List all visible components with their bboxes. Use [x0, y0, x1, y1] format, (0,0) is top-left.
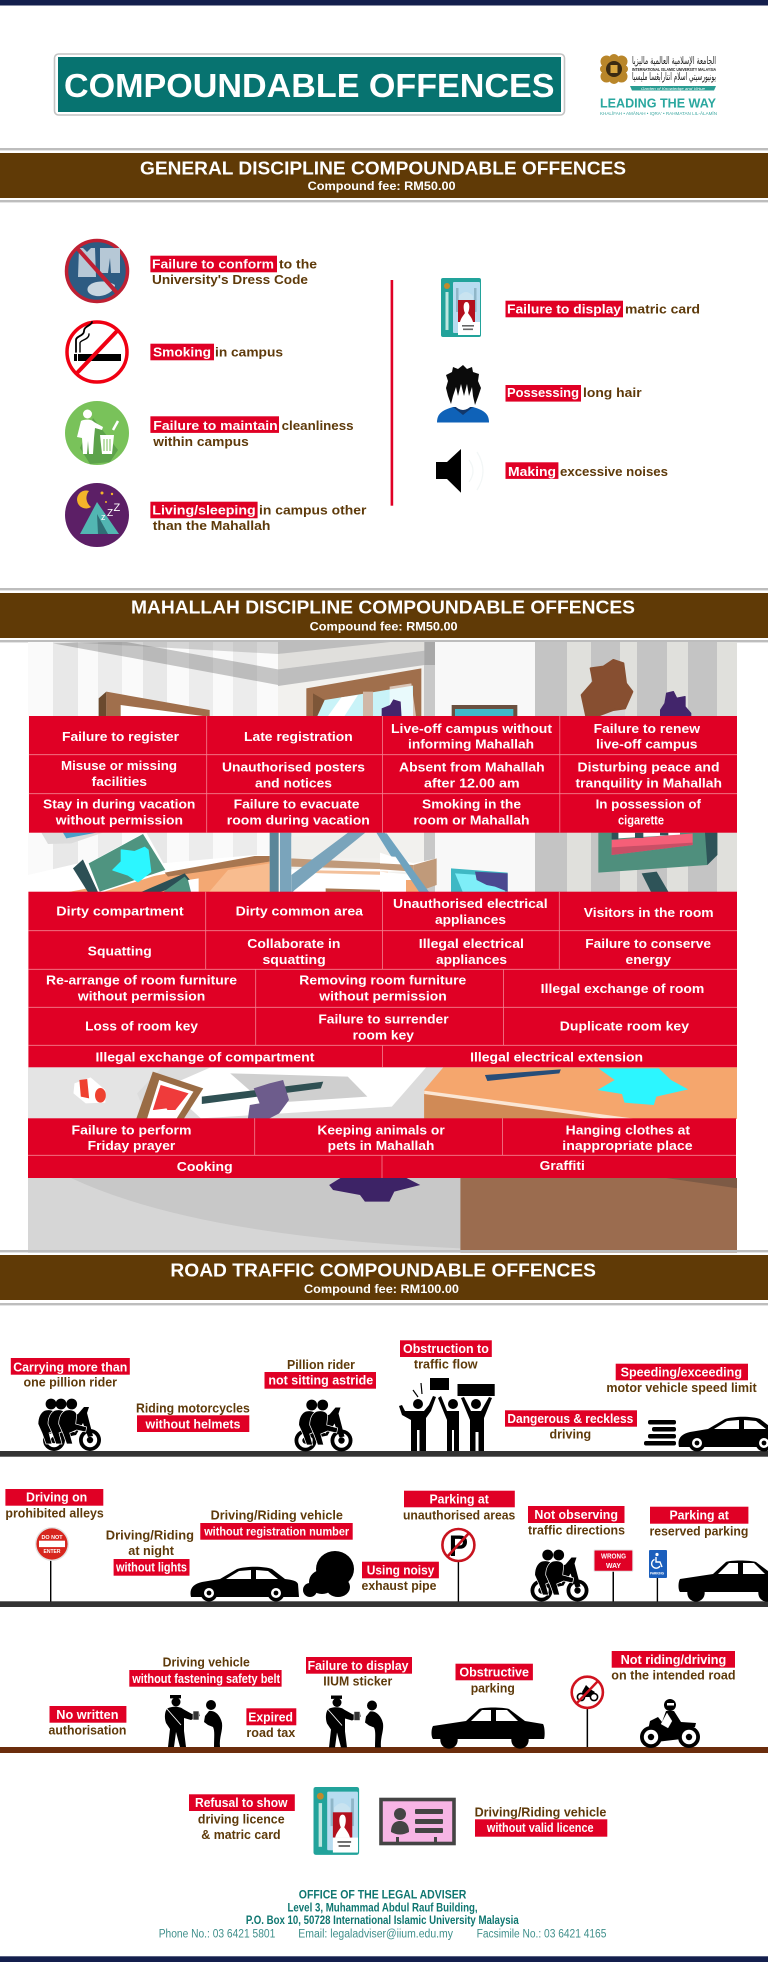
label: without valid licence: Driving/Riding vehicle: [475, 1805, 606, 1820]
label: without fastening safety belt: Driving vehicle: [163, 1654, 250, 1669]
table: mahallah offences group 2: Dirty common area: [236, 904, 364, 919]
icon: officer and driver: [326, 1696, 383, 1748]
logo: IIUM leading the way: KHALÎFAH • AMÂNAH • IQRA' • RAHMATAN LIL-ÂLAMÎN: [600, 110, 717, 116]
table: mahallah offences group 2: room key: [353, 1028, 415, 1043]
table: mahallah offences group 2: Illegal electrical: [419, 936, 524, 951]
icon: no smoking: [67, 322, 127, 382]
table: mahallah offences group 1: after 12.00 am: [424, 775, 520, 790]
logo: IIUM leading the way: LEADING THE WAY: [600, 96, 716, 110]
illustration: messy room background: [28, 638, 737, 1253]
footer: contact details: Level 3, Muhammad Abdul Rauf Building,: [288, 1902, 478, 1914]
table: mahallah offences group 1: without permission: [55, 813, 183, 828]
footer: contact details: [159, 1890, 606, 1940]
label: not riding on intended road: [611, 1651, 736, 1682]
icon: no parking sign: P: [449, 1530, 468, 1563]
icon: do not enter sign: ENTER: [44, 1549, 61, 1555]
table: mahallah offences group 2: [28, 892, 737, 1067]
label: not observing traffic directions: traffic directions: [528, 1522, 625, 1537]
table: mahallah offences group 2: without permission: [318, 989, 447, 1004]
label: not observing traffic directions: Not observing: [534, 1507, 618, 1522]
section header: general discipline: [0, 148, 768, 202]
section header: road traffic: ROAD TRAFFIC COMPOUNDABLE OFFENCES: [170, 1260, 596, 1281]
icon: exhaust smoke: [303, 1551, 354, 1597]
tag: making noises: Making: [508, 464, 556, 479]
label: without valid licence: [475, 1805, 607, 1837]
table: mahallah offences group 1: Failure to renew: [594, 721, 701, 736]
footer: contact details: OFFICE OF THE LEGAL ADVISER: [299, 1890, 467, 1902]
table: mahallah offences group 2: Failure to conserve: [585, 936, 711, 951]
label: without registration number: Driving/Riding vehicle: [211, 1508, 343, 1523]
tag: living/sleeping: Living/sleeping: [152, 502, 256, 517]
table: mahallah offences group 1: informing Mahallah: [408, 737, 534, 752]
icon: no improper dress: [66, 240, 128, 302]
label: expired road tax: road tax: [246, 1725, 296, 1740]
logo: IIUM leading the way: [600, 54, 717, 116]
icon: long hair: [437, 365, 489, 422]
icon: protesters: [399, 1378, 495, 1451]
label: failure to display IIUM sticker: IIUM sticker: [323, 1673, 392, 1688]
icon: littering: [65, 401, 129, 465]
section header: mahallah discipline: Compound fee: RM50.00: [310, 620, 458, 634]
table: mahallah offences group 1: live-off campus: [596, 737, 698, 752]
tag: failure to conform: Failure to conform: [152, 257, 274, 272]
logo: IIUM leading the way: INTERNATIONAL ISLAMIC UNIVERSITY MALAYSIA: [632, 67, 716, 73]
label: carrying more than one pillion rider: [11, 1358, 130, 1390]
panel: licence offences: [189, 1787, 607, 1855]
footer: contact details: Phone No.: 03 6421 5801: [159, 1928, 275, 1940]
label: driving on prohibited alleys: [5, 1489, 104, 1521]
table: mahallah offences group 2: Removing room furniture: [299, 973, 466, 988]
table: mahallah offences group 2: appliances: [436, 952, 507, 967]
bottom navy bar: [0, 1956, 768, 1962]
icon: car: [190, 1567, 299, 1602]
tag: smoking: [150, 344, 283, 360]
footer: contact details: Facsimile No.: 03 6421 4165: [477, 1928, 606, 1940]
panel: road row 2: [0, 1489, 768, 1607]
tag: failure to maintain: cleanliness: [282, 418, 354, 433]
label: no written authorisation: [48, 1706, 126, 1738]
label: obstructive parking: Obstructive: [459, 1665, 529, 1680]
label: carrying more than one pillion rider: Carrying more than: [13, 1359, 127, 1374]
label: riding without helmets: without helmets: [145, 1416, 240, 1431]
table: mahallah offences group 1: Live-off campus without: [391, 721, 553, 736]
label: dangerous and reckless driving: Dangerous & reckless: [507, 1411, 633, 1426]
panel: general discipline offences: [65, 240, 700, 547]
icon: no parking sign: [442, 1529, 474, 1602]
label: without fastening safety belt: without fastening safety belt: [131, 1672, 281, 1686]
icon: sleeping in tent: z: [101, 512, 106, 522]
tag: making noises: [506, 462, 668, 479]
table: mahallah offences group 2: Re-arrange of room furniture: [46, 973, 237, 988]
table: mahallah offences group 2: Duplicate room key: [560, 1019, 690, 1034]
label: failure to display IIUM sticker: [306, 1657, 412, 1688]
tag: smoking: in campus: [215, 344, 283, 359]
label: carrying more than one pillion rider: one pillion rider: [24, 1375, 117, 1390]
icon: sleeping in tent: Z: [114, 502, 120, 514]
label: refusal to show driving licence and matric card: Refusal to show: [195, 1795, 288, 1810]
section header: general discipline: Compound fee: RM50.00: [308, 179, 456, 193]
tag: failure to conform: [150, 256, 317, 287]
label: parking at unauthorised areas: Parking at: [430, 1491, 489, 1506]
icon: wrong way sign: WAY: [606, 1563, 621, 1570]
section header: road traffic: [0, 1250, 768, 1305]
table: mahallah offences group 1: Unauthorised posters: [222, 759, 365, 774]
icon: wrong way sign: [594, 1550, 633, 1602]
footer: contact details: Email: legaladviser@iium.edu.my: [298, 1928, 453, 1940]
icon: do not enter sign: DO NOT: [42, 1535, 63, 1541]
icon: parked car: [678, 1560, 768, 1602]
icon: reserved parking sign: PARKING: [650, 1572, 664, 1576]
tag: possessing: [506, 385, 642, 402]
table: mahallah offences group 2: Failure to surrender: [318, 1012, 449, 1027]
icon: driving licence: [381, 1800, 454, 1845]
icon: motorcycle with two riders: [294, 1400, 352, 1452]
road line 1: [0, 1451, 768, 1457]
label: parking at unauthorised areas: [403, 1491, 515, 1522]
label: obstructive parking: parking: [471, 1681, 515, 1696]
table: mahallah offences group 1: Smoking in the: [422, 797, 521, 812]
label: not riding on intended road: Not riding/driving: [621, 1652, 726, 1667]
icon: sleeping in tent: Z: [107, 508, 113, 519]
table: mahallah offences group 3: Graffiti: [540, 1158, 585, 1173]
table: mahallah offences group 1: Absent from Mahallah: [399, 759, 545, 774]
label: driving at night without lights: [106, 1527, 194, 1576]
tag: living/sleeping: than the Mahallah: [153, 518, 270, 533]
label: pillion rider not sitting astride: Pillion rider: [287, 1357, 355, 1372]
table: mahallah offences group 2: Unauthorised electrical: [393, 896, 548, 911]
table: mahallah offences group 1: cigarette: [618, 813, 664, 828]
label: not observing traffic directions: [528, 1506, 625, 1537]
road line 3: [0, 1747, 768, 1753]
label: using noisy exhaust pipe: [362, 1562, 439, 1593]
label: driving on prohibited alleys: prohibited alleys: [5, 1506, 104, 1521]
table: mahallah offences group 1: [29, 716, 737, 833]
label: refusal to show driving licence and matric card: driving licence: [198, 1811, 285, 1826]
icon: matric card: [314, 1787, 359, 1855]
label: obstructive parking: [456, 1664, 533, 1696]
label: parking at reserved parking: [650, 1507, 748, 1539]
table: mahallah offences group 3: Keeping animals or: [317, 1122, 445, 1137]
label: no written authorisation: No written: [56, 1707, 119, 1722]
label: failure to display IIUM sticker: Failure to display: [308, 1658, 409, 1673]
table: mahallah offences group 1: tranquility in Mahallah: [576, 775, 722, 790]
title plate: [54, 54, 564, 115]
label: driving at night without lights: without lights: [115, 1559, 187, 1574]
table: mahallah offences group 3: Hanging clothes at: [566, 1122, 691, 1137]
icon: sleeping in tent: [65, 483, 129, 547]
panel: road row 3: [0, 1651, 768, 1753]
label: speeding: Speeding/exceeding: [621, 1365, 742, 1380]
table: mahallah offences group 3: inappropriate place: [562, 1138, 693, 1153]
table: mahallah offences group 2: appliances: [435, 912, 506, 927]
logo: IIUM leading the way: Garden of Knowledge and Virtue: [641, 86, 706, 91]
tag: failure to maintain: Failure to maintain: [153, 418, 278, 433]
label: pillion rider not sitting astride: not sitting astride: [268, 1373, 373, 1388]
label: driving at night without lights: Driving/Riding: [106, 1527, 194, 1542]
icon: motorcycle with three riders: [38, 1399, 101, 1451]
tag: failure to display: Failure to display: [507, 301, 622, 316]
label: no written authorisation: authorisation: [48, 1723, 126, 1738]
icon: reserved parking sign: [649, 1550, 667, 1602]
label: driving at night without lights: at night: [128, 1543, 175, 1558]
table: mahallah offences group 2: Squatting: [88, 943, 152, 958]
tag: failure to maintain: [150, 416, 354, 449]
table: mahallah offences group 3: [28, 1118, 736, 1178]
table: mahallah offences group 1: Late registration: [244, 729, 353, 744]
label: refusal to show driving licence and matric card: & matric card: [201, 1827, 281, 1842]
label: dangerous and reckless driving: driving: [550, 1426, 591, 1441]
tag: possessing: long hair: [583, 385, 642, 400]
label: refusal to show driving licence and matric card: [189, 1794, 295, 1842]
label: not riding on intended road: on the intended road: [611, 1667, 736, 1682]
label: driving on prohibited alleys: Driving on: [26, 1490, 87, 1505]
label: expired road tax: Expired: [248, 1709, 293, 1724]
table: mahallah offences group 3: Cooking: [177, 1159, 233, 1174]
table: mahallah offences group 2: squatting: [262, 952, 326, 967]
table: mahallah offences group 1: room or Mahallah: [413, 813, 530, 828]
label: obstruction to traffic flow: Obstruction to: [403, 1341, 489, 1356]
table: mahallah offences group 1: Disturbing peace and: [578, 759, 720, 774]
label: obstruction to traffic flow: [400, 1340, 492, 1372]
table: mahallah offences group 1: room during vacation: [227, 813, 370, 828]
divider: [391, 280, 393, 506]
label: without registration number: [200, 1508, 353, 1540]
icon: matric card: [441, 278, 481, 337]
section header: mahallah discipline: MAHALLAH DISCIPLINE COMPOUNDABLE OFFENCES: [131, 596, 635, 617]
table: mahallah offences group 2: Visitors in the room: [584, 905, 714, 920]
icon: motorcycle with two riders: [530, 1550, 588, 1602]
tag: failure to maintain: within campus: [152, 434, 249, 449]
label: pillion rider not sitting astride: [264, 1357, 376, 1389]
table: mahallah offences group 1: Stay in during vacation: [43, 797, 195, 812]
table: mahallah offences group 1: In possession of: [596, 797, 702, 812]
table: mahallah offences group 2: Illegal exchange of compartment: [96, 1049, 315, 1064]
tag: living/sleeping: in campus other: [259, 502, 366, 517]
label: using noisy exhaust pipe: Using noisy: [367, 1563, 435, 1578]
table: mahallah offences group 3: Friday prayer: [88, 1138, 175, 1153]
label: without fastening safety belt: [129, 1654, 282, 1687]
label: speeding: motor vehicle speed limit: [606, 1380, 757, 1395]
tag: failure to display: [506, 301, 700, 317]
tag: failure to conform: University's Dress Code: [152, 272, 308, 287]
label: obstruction to traffic flow: traffic flow: [414, 1357, 478, 1372]
table: mahallah offences group 1: and notices: [255, 775, 332, 790]
table: mahallah offences group 2: Illegal electrical extension: [470, 1049, 643, 1064]
table: mahallah offences group 2: Dirty compartment: [56, 904, 184, 919]
label: dangerous and reckless driving: [505, 1410, 637, 1441]
label: speeding: [606, 1364, 757, 1395]
label: using noisy exhaust pipe: exhaust pipe: [362, 1578, 436, 1593]
tag: smoking: Smoking: [153, 344, 211, 359]
label: parking at reserved parking: reserved parking: [650, 1524, 748, 1539]
icon: parked car: [432, 1708, 545, 1749]
tag: living/sleeping: [150, 502, 366, 533]
table: mahallah offences group 2: without permission: [77, 989, 205, 1004]
label: without registration number: without registration number: [203, 1524, 349, 1538]
table: mahallah offences group 1: Failure to register: [62, 729, 179, 744]
label: without valid licence: without valid licence: [486, 1821, 594, 1835]
label: riding without helmets: Riding motorcycles: [136, 1400, 250, 1415]
icon: speeding car: [644, 1417, 768, 1452]
footer: contact details: P.O. Box 10, 50728 International Islamic University Malaysia: [246, 1915, 519, 1927]
icon: motorcyclist with helmet: [640, 1699, 700, 1748]
table: mahallah offences group 2: Illegal exchange of room: [541, 981, 704, 996]
table: mahallah offences group 3: Failure to perform: [72, 1122, 192, 1137]
label: parking at unauthorised areas: unauthorised areas: [403, 1507, 515, 1522]
tag: failure to display: matric card: [625, 301, 700, 316]
icon: no motorcycle sign: [572, 1677, 603, 1747]
table: mahallah offences group 2: Loss of room key: [85, 1019, 199, 1034]
tag: making noises: excessive noises: [560, 464, 668, 479]
road line 2: [0, 1601, 768, 1607]
table: mahallah offences group 1: Failure to evacuate: [234, 797, 360, 812]
tag: failure to conform: to the: [279, 257, 317, 272]
label: riding without helmets: [136, 1400, 250, 1432]
table: mahallah offences group 1: Misuse or missing: [61, 758, 177, 773]
table: mahallah offences group 2: energy: [626, 952, 672, 967]
label: expired road tax: [246, 1708, 296, 1740]
table: mahallah offences group 1: facilities: [92, 774, 147, 789]
section header: road traffic: Compound fee: RM100.00: [304, 1282, 459, 1296]
tag: possessing: Possessing: [507, 385, 579, 400]
panel: road row 1: [0, 1340, 768, 1457]
icon: officer and driver: [165, 1695, 222, 1747]
icon: wrong way sign: WRONG: [601, 1554, 627, 1561]
title plate: COMPOUNDABLE OFFENCES: [64, 67, 554, 104]
label: parking at reserved parking: Parking at: [670, 1508, 729, 1523]
section header: mahallah discipline: [0, 588, 768, 642]
icon: do not enter sign: [35, 1527, 69, 1602]
table: mahallah offences group 3: pets in Mahallah: [328, 1138, 434, 1153]
top navy bar: [0, 0, 768, 6]
icon: speaker: [436, 449, 483, 493]
section header: general discipline: GENERAL DISCIPLINE COMPOUNDABLE OFFENCES: [140, 158, 626, 178]
table: mahallah offences group 2: Collaborate in: [247, 936, 340, 951]
